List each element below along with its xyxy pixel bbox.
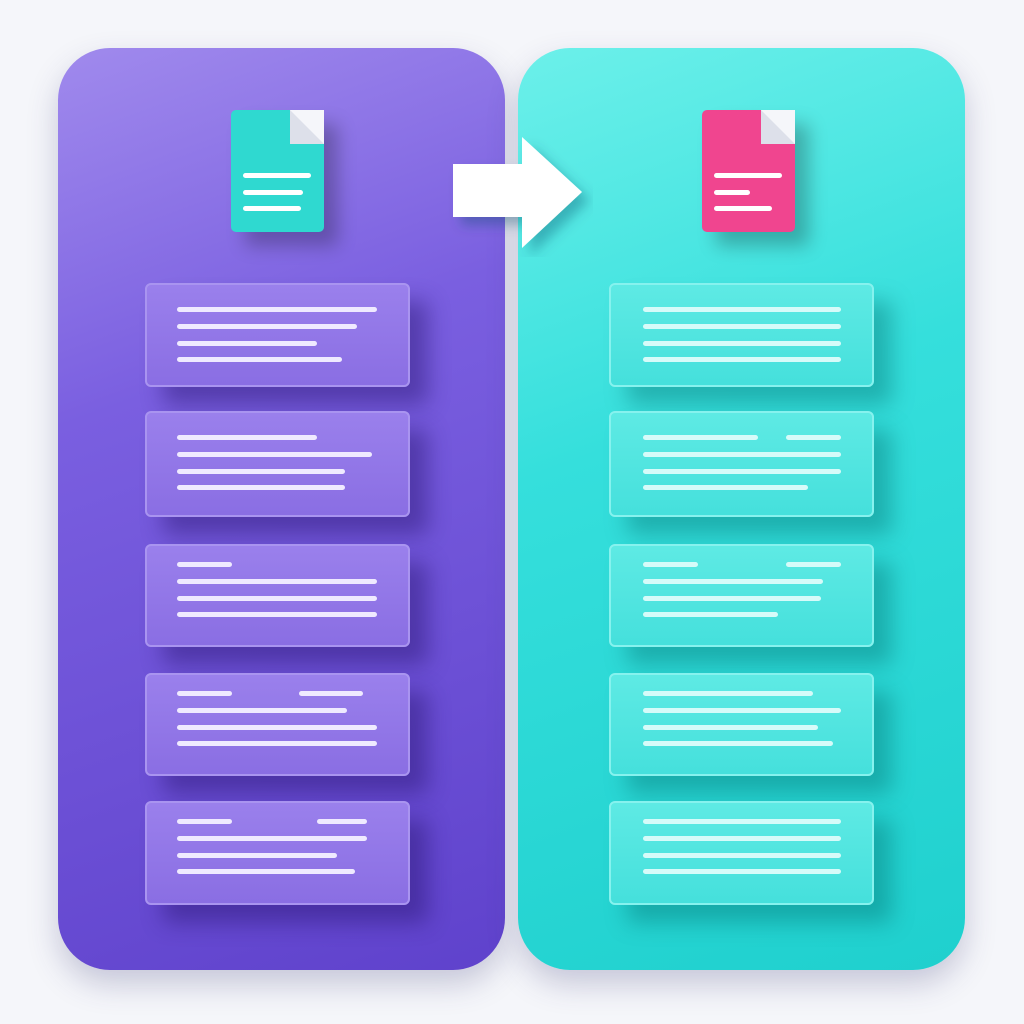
icon: pink document: [702, 110, 795, 232]
card 1: [609, 283, 874, 387]
card 2: [609, 411, 874, 517]
card 1: [145, 283, 410, 387]
arrow: white right arrow: [453, 137, 592, 256]
card 4: [145, 673, 410, 776]
card 3: [145, 544, 410, 647]
card 2: [145, 411, 410, 517]
card 5: [145, 801, 410, 905]
card 5: [609, 801, 874, 905]
card 3: [609, 544, 874, 647]
panel: left purple: [58, 48, 505, 970]
panel: right teal: [518, 48, 965, 970]
card 4: [609, 673, 874, 776]
icon: teal document: [231, 110, 324, 232]
